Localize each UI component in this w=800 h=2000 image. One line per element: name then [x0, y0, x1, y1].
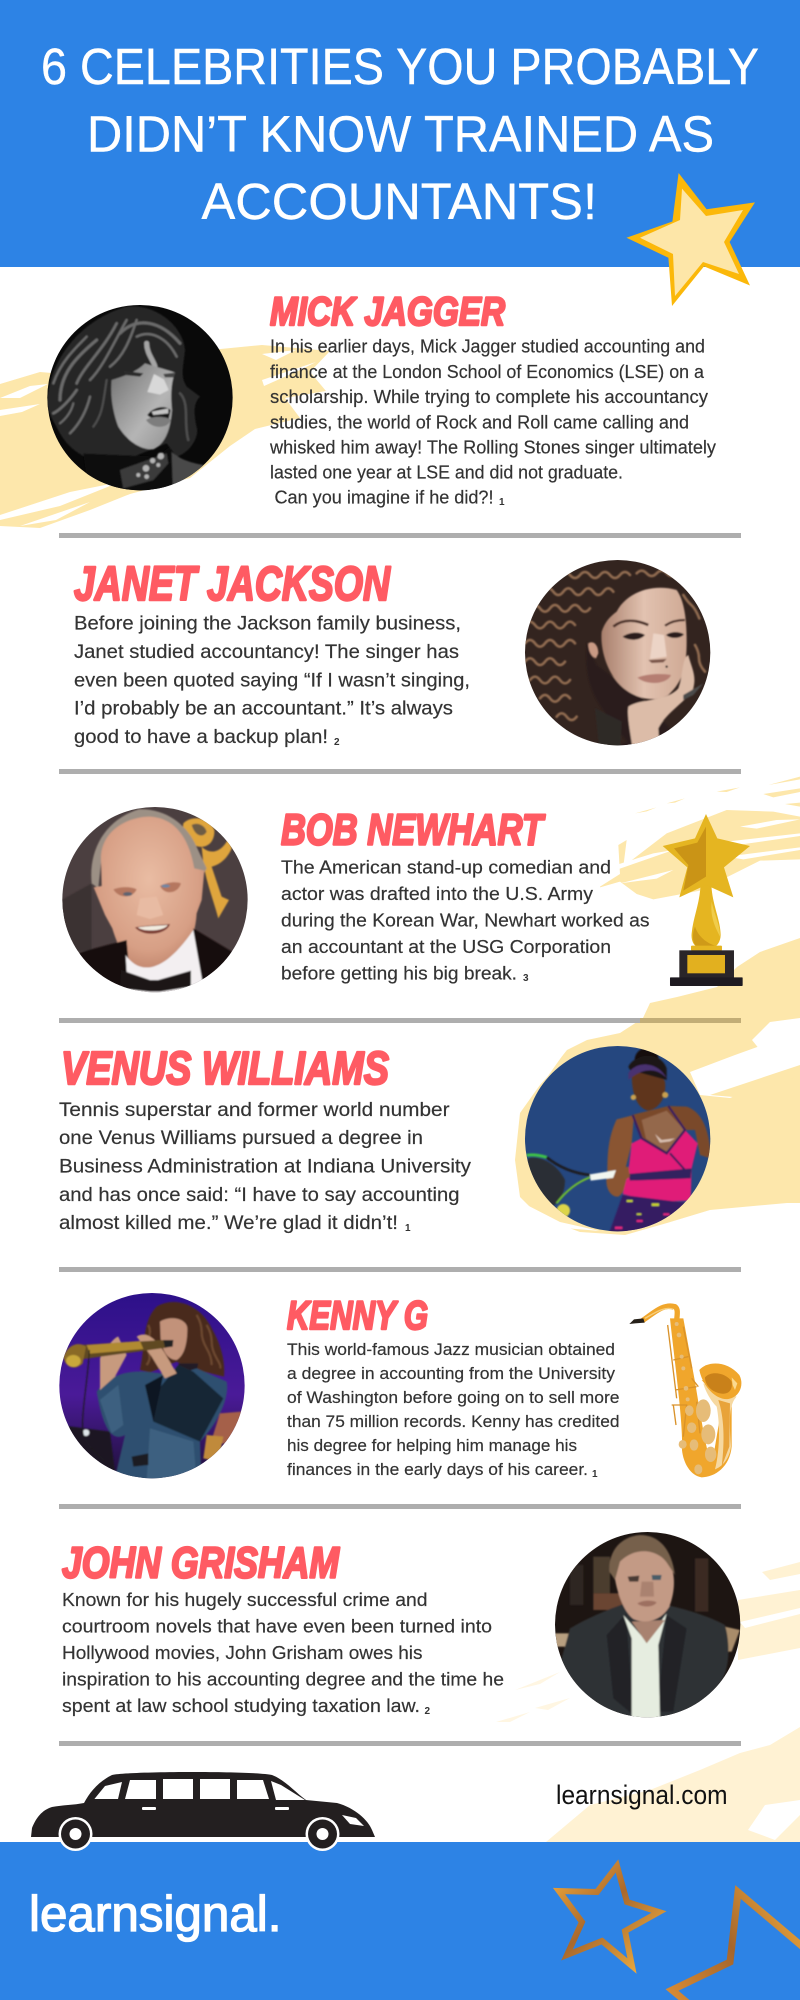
text: Mick Jagger bio: finance at the London School of Economics (LSE) on a [270, 362, 705, 382]
text: John Grisham bio: Hollywood movies, John Grisham owes his [62, 1642, 422, 1663]
text: Venus Williams bio: 1 [405, 1223, 411, 1234]
title: DIDN’T KNOW TRAINED AS [87, 106, 714, 162]
photo: Venus Williams [525, 1046, 710, 1232]
text: John Grisham bio: spent at law school studying taxation law. [62, 1695, 420, 1716]
text: Venus Williams bio: and has once said: “I have to say accounting [59, 1184, 460, 1206]
divider [59, 1018, 741, 1023]
icon: header star [626, 173, 755, 306]
text: Janet Jackson bio: 2 [334, 737, 340, 748]
text: Janet Jackson bio: Janet studied accountancy! The singer has [74, 641, 459, 663]
text: Bob Newhart bio: an accountant at the USG Corporation [281, 936, 611, 957]
brush stroke behind Mick Jagger [0, 345, 330, 528]
divider [59, 1267, 741, 1272]
title [41, 38, 759, 230]
text: Janet Jackson bio: good to have a backup plan! [74, 726, 328, 748]
text: Bob Newhart bio: 3 [523, 973, 529, 984]
photo: Mick Jagger [47, 305, 233, 490]
divider [59, 1504, 741, 1509]
text: Mick Jagger bio [269, 336, 716, 508]
heading: Kenny G: KENNY G [287, 1294, 428, 1338]
text: Venus Williams bio [59, 1099, 471, 1234]
text: Mick Jagger bio: whisked him away! The Rolling Stones singer ultimately [269, 438, 716, 458]
icon: trophy [663, 814, 750, 986]
text: Kenny G bio: a degree in accounting from the University [287, 1364, 616, 1383]
divider [59, 1741, 741, 1746]
text: John Grisham bio [62, 1589, 504, 1717]
text: Venus Williams bio: almost killed me.” We’re glad it didn’t! [59, 1212, 398, 1234]
photo: Janet Jackson [525, 560, 710, 746]
text: Mick Jagger bio: Can you imagine if he did?! [274, 488, 494, 508]
text: Kenny G bio: This world-famous Jazz musician obtained [287, 1340, 615, 1359]
icon: limousine [31, 1772, 375, 1851]
website url: learnsignal.com [556, 1780, 728, 1810]
photo: Bob Newhart [62, 807, 248, 992]
text: Bob Newhart bio: during the Korean War, Newhart worked as [281, 910, 650, 930]
text: Kenny G bio: 1 [592, 1469, 598, 1480]
text: Kenny G bio: of Washington before going on to sell more [287, 1388, 620, 1407]
text: Bob Newhart bio: actor was drafted into the U.S. Army [281, 883, 594, 904]
brush stroke behind John Grisham and footer [496, 1562, 800, 1842]
heading: Bob Newhart: BOB NEWHART [281, 806, 545, 854]
text: Mick Jagger bio: In his earlier days, Mick Jagger studied accounting and [270, 336, 705, 356]
text: Janet Jackson bio: even been quoted saying “If I wasn’t singing, [74, 670, 470, 692]
icon: saxophone [629, 1306, 741, 1477]
divider [59, 533, 741, 538]
text: Kenny G bio [287, 1340, 620, 1480]
heading: Janet Jackson: JANET JACKSON [74, 558, 391, 611]
text: John Grisham bio: Known for his hugely successful crime and [62, 1589, 427, 1610]
icon: footer outline star [559, 1866, 659, 1966]
text: Mick Jagger bio: lasted one year at LSE and did not graduate. [270, 462, 623, 482]
text: John Grisham bio: 2 [424, 1706, 430, 1717]
text: Kenny G bio: finances in the early days of his career. [287, 1460, 588, 1479]
text: Bob Newhart bio: The American stand-up comedian and [281, 856, 611, 878]
text: Kenny G bio: than 75 million records. Kenny has credited [287, 1412, 620, 1431]
header band [0, 0, 800, 267]
text: Janet Jackson bio: Before joining the Jackson family business, [74, 612, 461, 634]
photo: John Grisham [555, 1532, 740, 1718]
text: Bob Newhart bio: before getting his big break. [281, 962, 517, 984]
text: Mick Jagger bio: scholarship. While trying to complete his accountancy [270, 387, 708, 407]
title: ACCOUNTANTS! [202, 173, 597, 230]
text: Venus Williams bio: one Venus Williams pursued a degree in [59, 1127, 423, 1149]
photo: Kenny G [59, 1293, 245, 1478]
text: John Grisham bio: courtroom novels that have even been turned into [62, 1616, 492, 1636]
divider [59, 769, 741, 774]
text: Janet Jackson bio: I’d probably be an accountant.” It’s always [74, 698, 453, 720]
brush stroke behind Bob Newhart and Venus Williams [515, 777, 800, 1235]
heading: Mick Jagger: MICK JAGGER [270, 290, 505, 334]
text: Kenny G bio: his degree for helping him manage his [287, 1436, 577, 1455]
icon: footer cropped star [672, 1892, 800, 2000]
text: John Grisham bio: inspiration to his accounting degree and the time he [62, 1668, 504, 1690]
text: Bob Newhart bio [281, 856, 650, 984]
text: Venus Williams bio: Tennis superstar and former world number [59, 1099, 450, 1121]
text: Venus Williams bio: Business Administration at Indiana University [59, 1156, 471, 1178]
footer band [0, 1842, 800, 2000]
text: Janet Jackson bio [74, 612, 470, 748]
heading: Venus Williams: VENUS WILLIAMS [61, 1042, 389, 1094]
text: Mick Jagger bio: 1 [499, 497, 505, 508]
heading: John Grisham: JOHN GRISHAM [62, 1538, 340, 1588]
text: Mick Jagger bio: studies, the world of Rock and Roll came calling and [270, 412, 689, 432]
footer logo: learnsignal. [29, 1886, 282, 1942]
